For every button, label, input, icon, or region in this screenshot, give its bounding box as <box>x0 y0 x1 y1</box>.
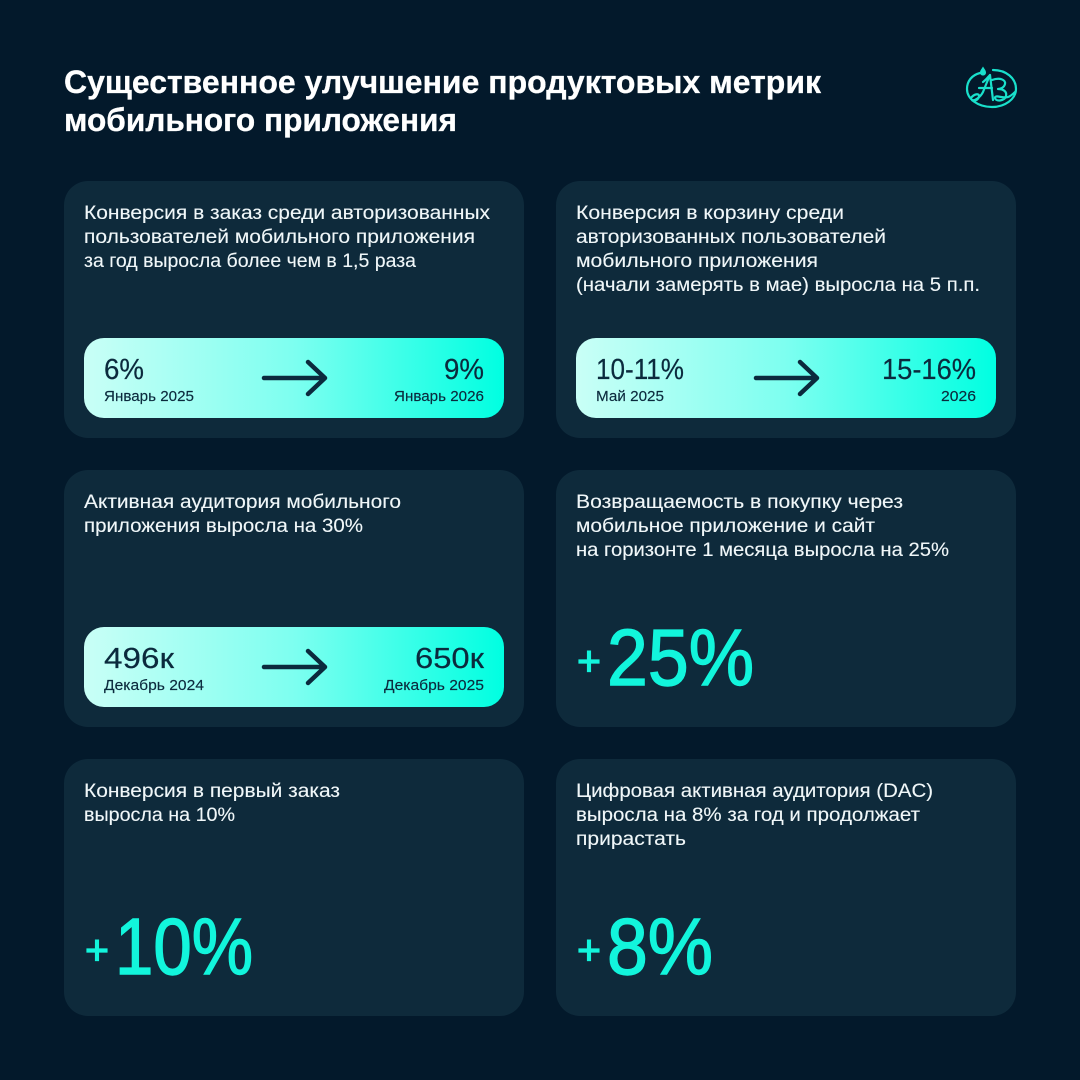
comparison bar: Декабрь 2025 <box>384 677 484 694</box>
comparison bar: 6% <box>104 354 144 386</box>
panel: retention <box>556 470 1016 727</box>
big metric: 25% <box>607 613 754 702</box>
panel text: выросла на 8% за год и продолжает <box>576 805 920 826</box>
panel text: Цифровая активная аудитория (DAC) <box>576 781 933 802</box>
comparison bar: Январь 2026 <box>394 388 484 405</box>
comparison bar: Декабрь 2024 <box>104 677 204 694</box>
big metric: + <box>577 926 601 973</box>
panel text: прирастать <box>576 829 686 850</box>
panel: conversion to cart <box>556 181 1016 438</box>
big metric: + <box>85 926 109 973</box>
big metric: 8% <box>607 902 713 991</box>
panel text: (начали замерять в мае) выросла на 5 п.п. <box>576 275 980 296</box>
panel: active audience <box>64 470 524 727</box>
panel text: на горизонте 1 месяца выросла на 25% <box>576 540 949 561</box>
comparison bar <box>84 338 504 418</box>
comparison bar: 496к <box>104 643 175 675</box>
comparison bar: 2026 <box>941 388 976 405</box>
panel text <box>576 492 949 561</box>
title: мобильного приложения <box>64 102 457 138</box>
panel text: Возвращаемость в покупку через <box>576 492 903 513</box>
panel text: Активная аудитория мобильного <box>84 492 401 513</box>
panel text: мобильное приложение и сайт <box>576 516 875 537</box>
title: Существенное улучшение продуктовых метрик <box>64 64 822 100</box>
panel: digital active audience <box>556 759 1016 1016</box>
comparison bar: Январь 2025 <box>104 388 194 405</box>
comparison bar <box>576 338 996 418</box>
panel text <box>84 492 401 537</box>
panel text: Конверсия в корзину среди <box>576 203 844 224</box>
panel text: авторизованных пользователей <box>576 227 886 248</box>
big metric: 10% <box>115 902 253 991</box>
panel text <box>84 203 491 272</box>
title <box>64 64 822 138</box>
panel text: Конверсия в заказ среди авторизованных <box>84 203 491 224</box>
comparison bar: Май 2025 <box>596 388 664 405</box>
panel text: выросла на 10% <box>84 805 235 826</box>
panel: first order conversion <box>64 759 524 1016</box>
panel text <box>84 781 340 826</box>
panel text: приложения выросла на 30% <box>84 516 363 537</box>
comparison bar: 10-11% <box>596 354 684 386</box>
panel text: пользователей мобильного приложения <box>84 227 475 248</box>
comparison bar <box>84 627 504 707</box>
panel text: за год выросла более чем в 1,5 раза <box>84 251 416 272</box>
comparison bar: 650к <box>415 643 485 675</box>
panel text: мобильного приложения <box>576 251 818 272</box>
big metric: + <box>577 637 601 684</box>
icon: logo <box>967 66 1016 107</box>
comparison bar: 9% <box>444 354 484 386</box>
panel text: Конверсия в первый заказ <box>84 781 340 802</box>
panel: conversion to order <box>64 181 524 438</box>
panel text <box>576 203 980 296</box>
panel text <box>576 781 933 850</box>
comparison bar: 15-16% <box>882 354 976 386</box>
